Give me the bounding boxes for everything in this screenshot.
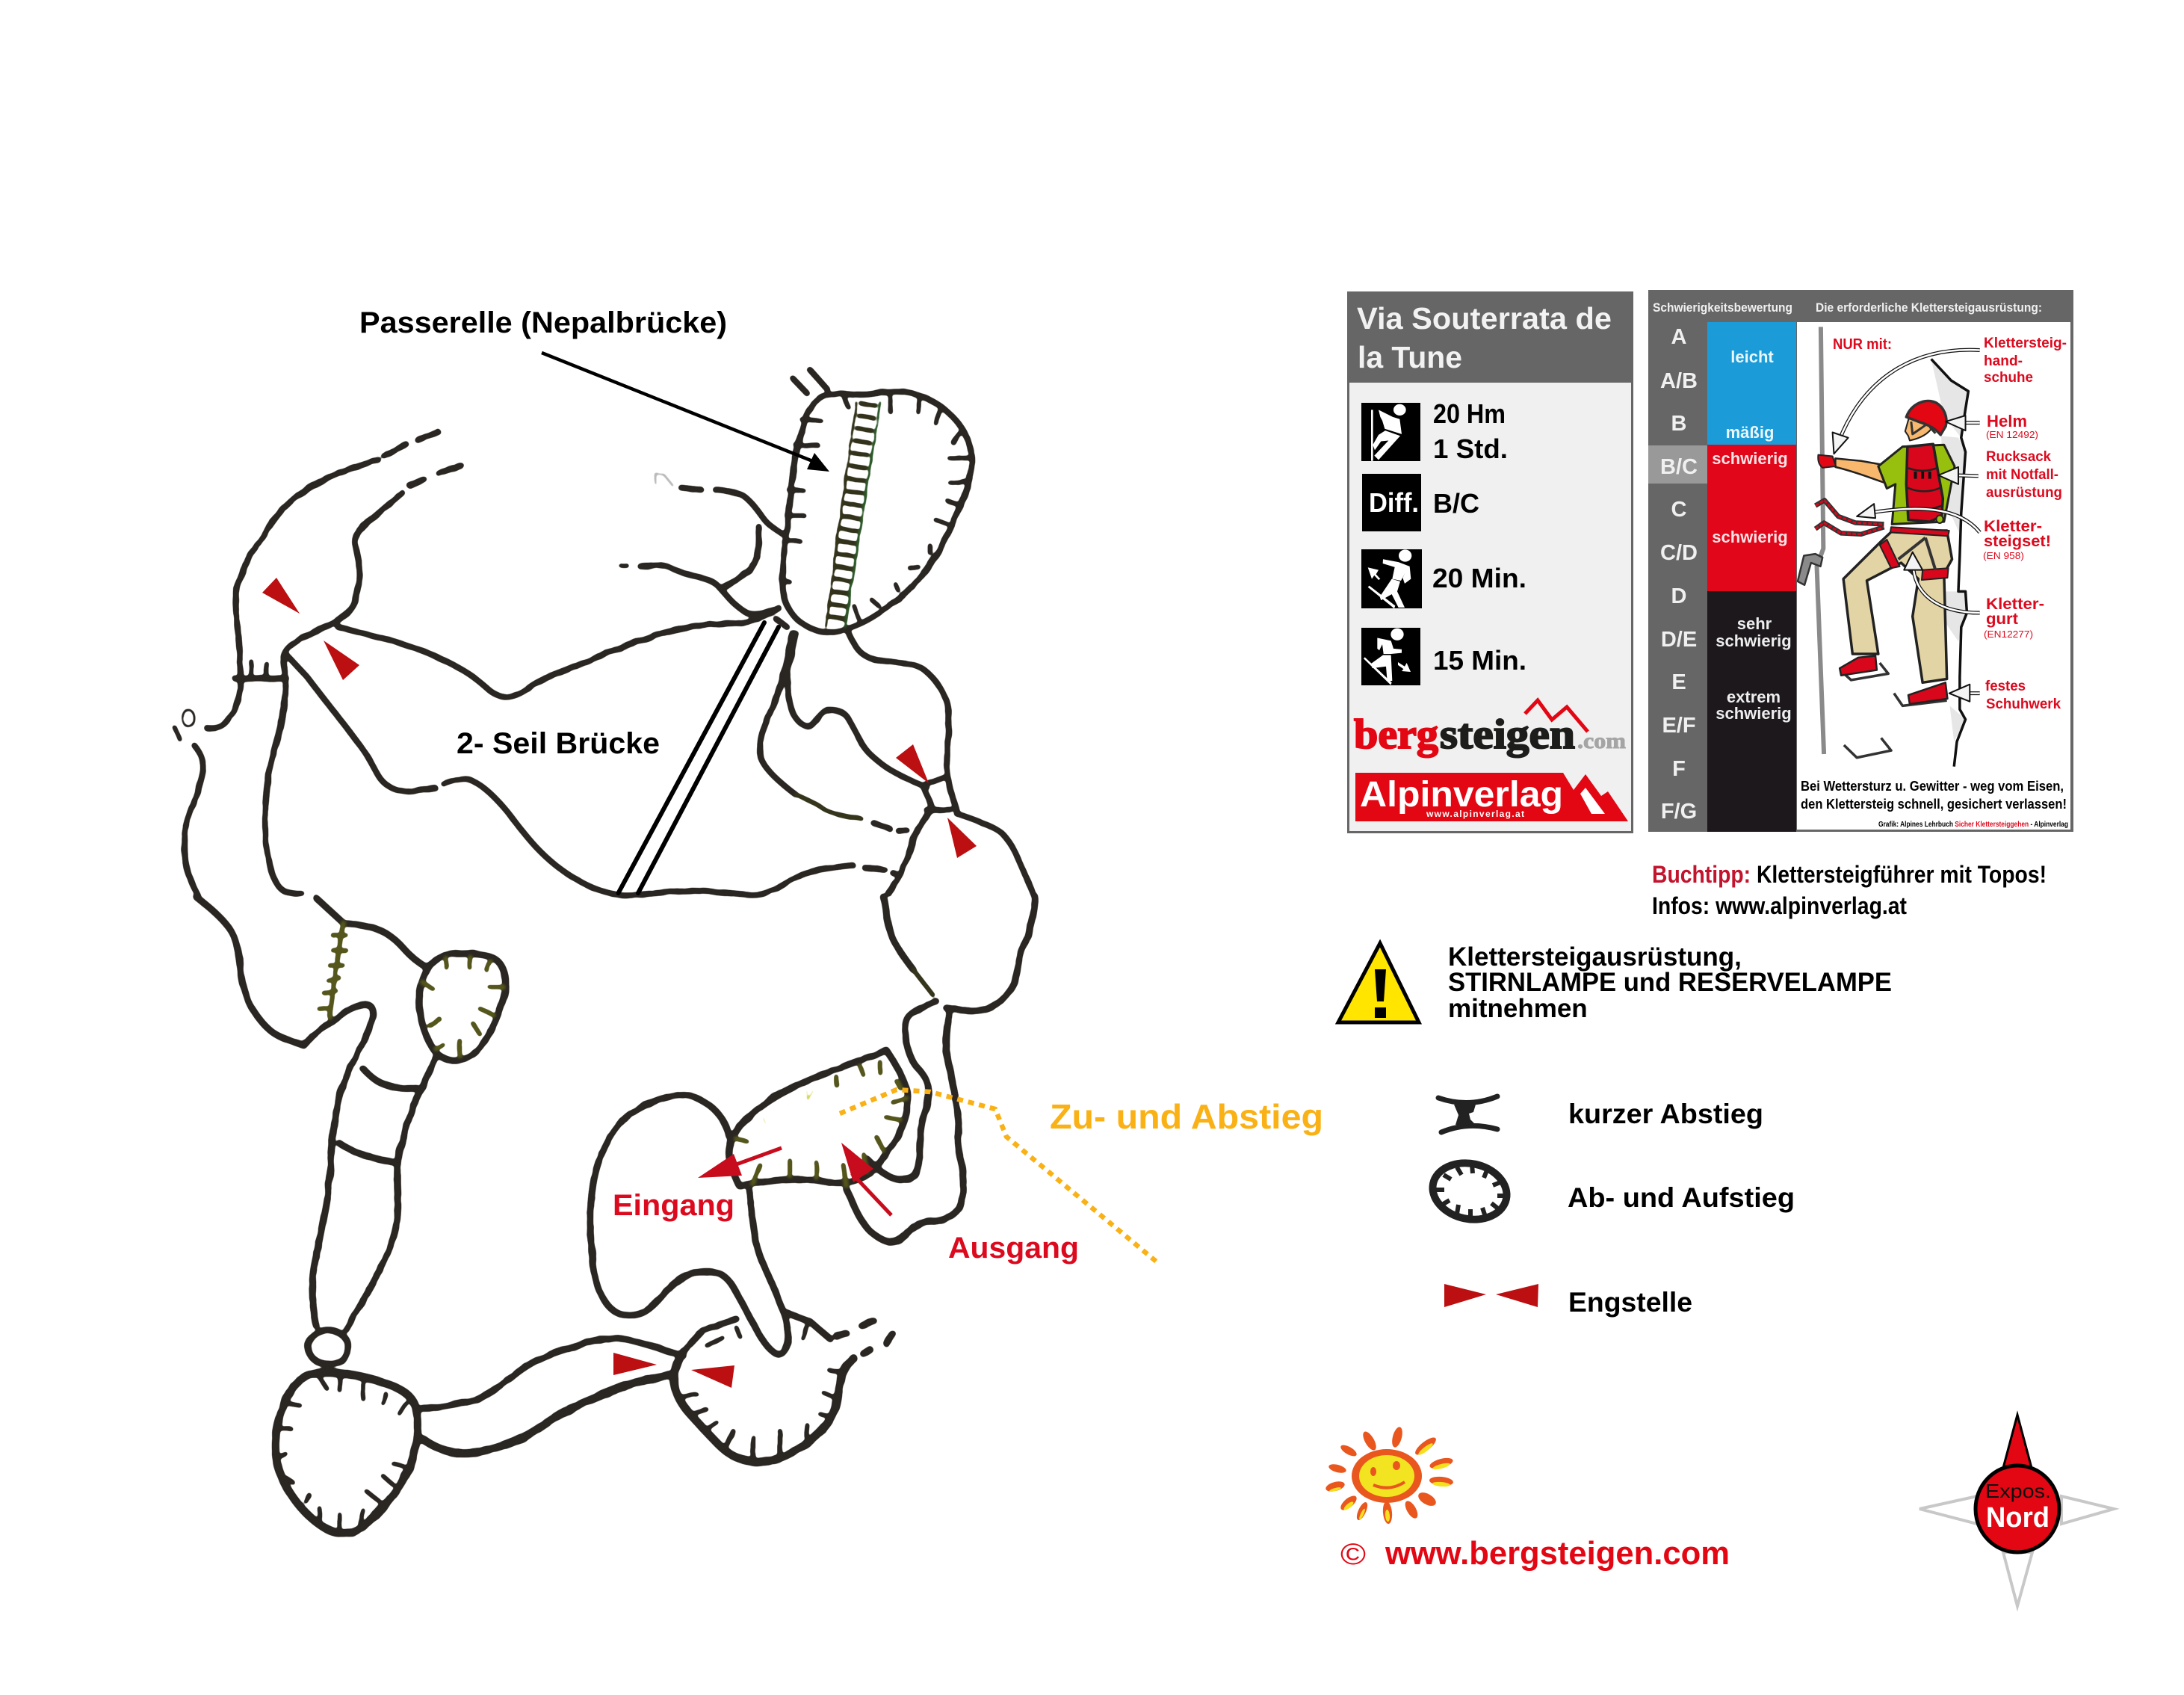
harness [1880, 527, 1949, 580]
compass text: Expos. [1985, 1480, 2051, 1502]
logo: bergsteigen.com [1354, 700, 1626, 758]
storm warning text [1801, 779, 2067, 812]
book tip [1652, 861, 2047, 919]
Nepal bridge chamber [782, 370, 973, 632]
difficulty grades: B [1671, 412, 1686, 436]
difficulty band: leicht to mäßig: leicht [1730, 348, 1774, 366]
copyright and website: © [1340, 1538, 1366, 1571]
route stats: 20 Hm [1433, 398, 1506, 429]
logo: bergsteigen.com: berg [1354, 711, 1438, 758]
logo: Alpinverlag: www.alpinverlag.at [1426, 809, 1524, 819]
right chamber lower [883, 897, 1036, 1010]
bottom left chamber [275, 1330, 418, 1534]
exit tube [847, 1002, 963, 1242]
difficulty band: sehr and extrem schwierig [1707, 591, 1796, 832]
boots [1840, 655, 1947, 704]
entrance arrow [698, 1148, 782, 1178]
panel headers [1653, 300, 2042, 315]
compass disc [1976, 1466, 2059, 1552]
difficulty band: sehr and extrem schwierig: schwierig [1716, 632, 1792, 650]
via ferrata set lanyards [1816, 500, 1884, 534]
difficulty band: sehr and extrem schwierig: sehr [1737, 614, 1772, 633]
current grade highlight [1648, 445, 1707, 484]
equipment area [1797, 322, 2070, 830]
long left tube [197, 897, 436, 1330]
panel title: Via Souterrata de [1357, 301, 1612, 336]
warning text: Klettersteigausrüstung, [1448, 942, 1742, 972]
equipment labels: mit Notfall- [1986, 467, 2058, 483]
difficulty grades: E [1671, 670, 1686, 694]
logo: Alpinverlag: Alpinverlag [1360, 775, 1563, 815]
legend label: kurzer Abstieg: kurzer Abstieg [1568, 1099, 1763, 1129]
storm warning text: Bei Wettersturz u. Gewitter - weg vom Eisen, [1801, 779, 2064, 794]
sun ray highlights [1329, 1442, 1450, 1522]
difficulty grades: D/E [1661, 628, 1697, 652]
logo: bergsteigen.com: .com [1577, 729, 1626, 753]
icon: Diff.: Diff. [1369, 487, 1419, 518]
route stats: B/C [1433, 488, 1479, 519]
panel frame [1347, 291, 1633, 833]
label: Ausgang: Ausgang [948, 1232, 1079, 1265]
difficulty band: sehr and extrem schwierig: schwierig [1716, 704, 1792, 723]
compass north spike [2003, 1415, 2032, 1468]
karabiner on cable [1798, 554, 1822, 585]
icon: smiling sun [1325, 1426, 1454, 1524]
icon: warning triangle [1338, 943, 1419, 1022]
route stats: 20 Min. [1432, 563, 1526, 593]
panel headers: Schwierigkeitsbewertung [1653, 300, 1792, 315]
upper left chamber [175, 432, 461, 895]
panel frame [1648, 290, 2073, 832]
exit arrow [841, 1143, 891, 1215]
two-rope bridge [619, 623, 779, 893]
rucksack [1906, 444, 1943, 523]
panel title: la Tune [1358, 340, 1462, 374]
equipment labels: Schuhwerk [1986, 697, 2061, 712]
panel headers: Die erforderliche Klettersteigausrüstung: [1816, 300, 2042, 315]
big left passage [590, 1095, 788, 1354]
steel cable [1817, 327, 1824, 754]
legend [1427, 1096, 1795, 1318]
legend label: Ab- und Aufstieg: Ab- und Aufstieg [1568, 1182, 1795, 1213]
difficulty grades: B/C [1660, 455, 1698, 479]
right chamber upper [888, 812, 1035, 897]
equipment labels: (EN 12492) [1986, 429, 2038, 440]
equipment labels: Klettersteig- [1984, 336, 2067, 351]
equipment labels: schuhe [1984, 370, 2033, 386]
compass: exposure north [1919, 1415, 2114, 1606]
storm warning text: den Klettersteig schnell, gesichert verlassen! [1801, 797, 2067, 812]
equipment labels: festes [1985, 679, 2026, 694]
illustration: climber on via ferrata [1798, 327, 1980, 767]
right passages [760, 629, 957, 831]
lower connecting tube [420, 1339, 683, 1454]
difficulty grades: D [1671, 584, 1686, 608]
difficulty band: schwierig [1707, 445, 1796, 591]
compass: exposure north: Nord [1986, 1502, 2050, 1534]
label: 2-Seil Brücke: 2- Seil Brücke [457, 727, 660, 760]
warning text: STIRNLAMPE und RESERVELAMPE [1448, 968, 1892, 997]
logo: bergsteigen.com: steigen [1440, 711, 1575, 758]
bottom right chamber [675, 1313, 894, 1462]
book tip: Buchtipp: Klettersteigführer mit Topos! [1652, 861, 2047, 888]
difficulty grades: F/G [1661, 800, 1697, 824]
route stats: 1 Std. [1433, 433, 1508, 464]
sun rays [1325, 1426, 1454, 1524]
icon: ascent and descent shaft [1427, 1156, 1512, 1226]
arm [1835, 458, 1887, 484]
equipment labels: Rucksack [1986, 449, 2051, 465]
connecting passages [287, 608, 896, 895]
copyright and website: www.bergsteigen.com [1385, 1536, 1730, 1572]
difficulty grades [1660, 325, 1698, 824]
equipment labels: gurt [1986, 611, 2018, 628]
sun face [1352, 1449, 1422, 1503]
difficulty grades: A/B [1660, 369, 1698, 393]
entrance chamber [728, 1050, 908, 1186]
panel: difficulty scale and equipment [1648, 290, 2073, 832]
difficulty grades: F [1672, 757, 1686, 781]
warning text: mitnehmen [1448, 994, 1588, 1023]
equipment labels [1833, 336, 2067, 712]
equipment labels: Helm [1987, 412, 2027, 430]
pointer arrows [1839, 350, 1980, 694]
difficulty band: leicht to mäßig: mäßig [1726, 423, 1774, 442]
glove [1818, 455, 1836, 468]
panel body [1349, 383, 1631, 831]
arrow to Nepal bridge [542, 353, 829, 472]
route stats [1432, 398, 1526, 676]
cave map sketch [175, 370, 1036, 1534]
icon: Diff. [1362, 474, 1421, 531]
shirt [1878, 445, 1955, 524]
icon: descent hiker [1361, 628, 1420, 685]
difficulty grades: E/F [1662, 714, 1696, 738]
panel title [1357, 301, 1612, 374]
equipment labels: Kletter- [1984, 518, 2042, 535]
equipment labels: (EN 958) [1983, 550, 2024, 561]
equipment labels: steigset! [1984, 533, 2051, 550]
lower map section [197, 897, 1036, 1534]
trousers [1843, 531, 1952, 682]
helmet and straps [1906, 401, 1946, 435]
equipment labels: Kletter- [1986, 596, 2044, 613]
label: Eingang: Eingang [613, 1189, 734, 1222]
legend label: Engstelle: Engstelle [1568, 1287, 1692, 1318]
difficulty band: schwierig: schwierig [1712, 449, 1788, 468]
difficulty band: leicht to mäßig [1707, 322, 1796, 445]
equipment labels: NUR mit: [1833, 336, 1892, 353]
upper map section [175, 370, 1035, 897]
route stats: 15 Min. [1433, 645, 1526, 676]
difficulty grades: A [1671, 325, 1687, 349]
logo: Alpinverlag [1355, 773, 1628, 821]
difficulty grades: C/D [1660, 541, 1698, 565]
difficulty grades: C [1671, 498, 1687, 522]
book tip: Infos: www.alpinverlag.at [1652, 892, 1907, 919]
warning text [1448, 942, 1892, 1023]
ladder passerelle [826, 402, 880, 627]
equipment labels: ausrüstung [1986, 485, 2062, 501]
graphic credit: Grafik: Alpines Lehrbuch Sicher Klettersteiggehen - Alpinverlag [1878, 821, 2068, 829]
icon: ascent hiker [1361, 549, 1422, 608]
equipment labels: (EN12277) [1984, 629, 2033, 640]
icon: climber [1361, 403, 1420, 461]
difficulty band: sehr and extrem schwierig: extrem [1727, 688, 1781, 706]
small round chamber [419, 954, 506, 1060]
rock wall [1931, 359, 1968, 767]
face and neck [1905, 416, 1933, 440]
iron steps [1844, 663, 1947, 758]
compass gray points [1919, 1496, 2114, 1606]
panel: route info [1347, 291, 1633, 833]
icon: narrow passage [1444, 1284, 1538, 1307]
equipment labels: hand- [1984, 353, 2023, 369]
narrow-passage markers on map [262, 578, 977, 1388]
side passages at Nepal chamber [621, 474, 787, 627]
label: Passerelle: Passerelle (Nepalbrücke) [359, 306, 727, 339]
label: Zu- und Abstieg: Zu- und Abstieg [1050, 1097, 1323, 1136]
dotted approach route [840, 1090, 1158, 1263]
difficulty band: schwierig: schwierig [1712, 528, 1788, 546]
icon: short descent [1438, 1096, 1497, 1132]
